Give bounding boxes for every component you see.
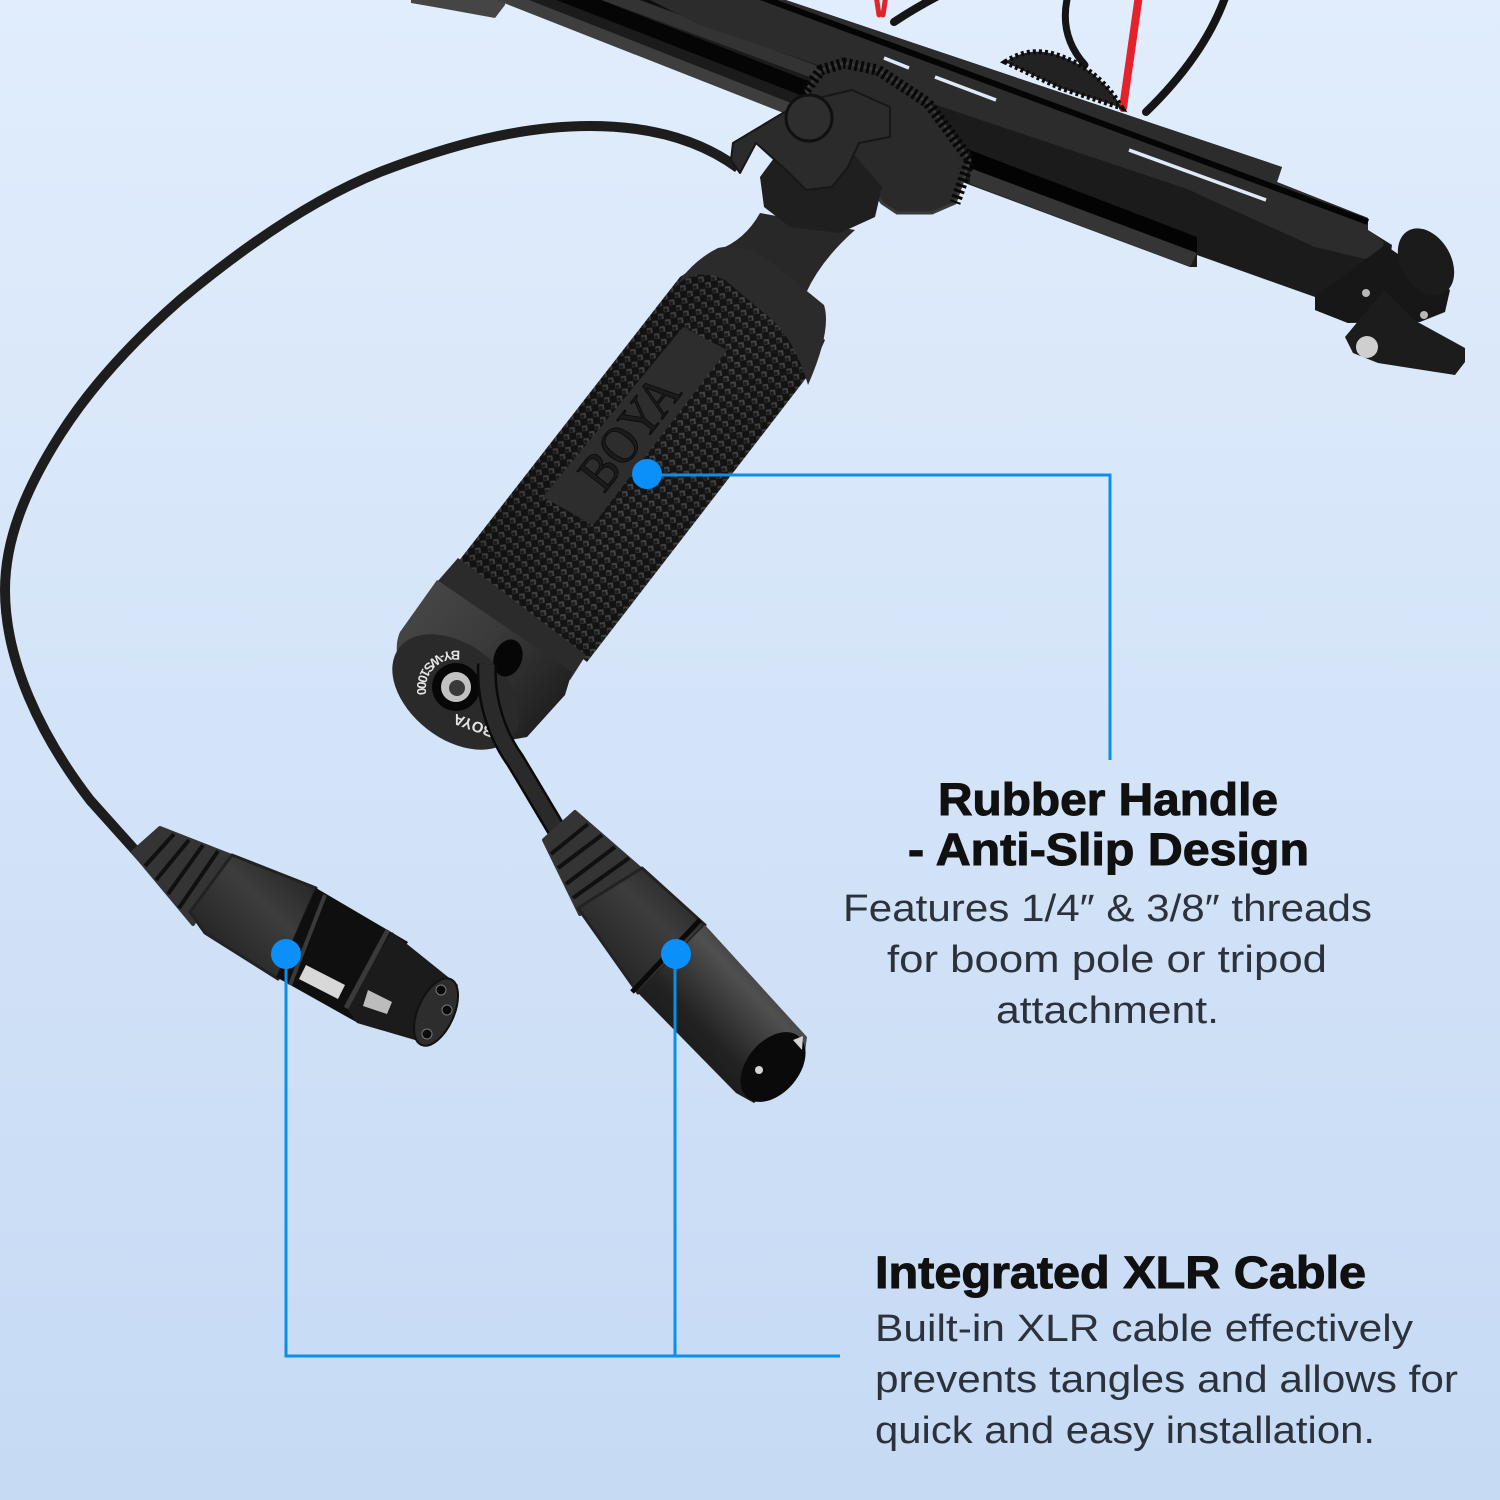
knurled grip [458,252,825,662]
wheel teeth [806,63,970,203]
plug face [727,1020,819,1114]
text block: rubber handle [843,774,1372,1032]
callout dot [632,459,662,489]
cap logo engraving: BOYA [451,710,496,740]
handle mount [718,63,970,293]
heading: Integrated XLR Cable [875,1247,1366,1298]
rail gray bands [500,0,860,113]
text block: XLR cable [875,1247,1458,1452]
description: prevents tangles and allows for [875,1359,1458,1401]
socket pins [422,985,452,1039]
cap engraving: BY-WS1000 [416,650,460,695]
barrel [190,855,316,979]
end block [1315,245,1450,323]
plug pins [755,1036,803,1074]
cap face [370,611,542,773]
short XLR cable [487,664,558,832]
rail body [503,0,1392,323]
front shell [345,932,458,1045]
latch windows [299,965,392,1014]
metal shell [638,925,807,1103]
socket face [405,972,467,1052]
shell ring [632,920,700,992]
lever knob [731,90,890,190]
shell ring [290,895,325,985]
disc knob [1386,218,1466,306]
barrel [578,868,705,993]
end piece [411,0,505,18]
female XLR connector [133,828,467,1052]
wing screw [1345,290,1465,375]
neck [718,213,855,293]
rail lower channel [970,150,1197,255]
description [875,1308,1458,1452]
suspension cables [876,0,1226,112]
front ring [346,930,388,1008]
lower collar [437,558,586,680]
ball joint [760,150,882,233]
thumb wheels [806,63,970,213]
heading: - Anti-Slip Design [908,824,1309,875]
description: for boom pole or tripod [887,939,1327,981]
grip shading [458,252,825,662]
BOYA logo: BOYA [566,364,692,501]
end cap [397,580,572,743]
rear thumb wheel [1005,52,1122,108]
microphone shock mount rail [411,0,1466,375]
callout leader: rubber handle [632,459,1110,760]
rubber handle [392,246,826,750]
rail upper plate [640,0,1384,262]
small bolts [1362,289,1428,319]
callout leader: XLR cable [271,939,840,1356]
long XLR cable [5,126,738,858]
female dot [271,939,301,969]
top collar [672,247,826,385]
strain relief [133,828,234,924]
knob button [786,95,832,141]
shell [276,888,408,1023]
description: quick and easy installation. [875,1410,1375,1452]
logo plate [543,327,727,525]
male XLR connector [544,812,819,1114]
rail lower flange [970,168,1197,267]
rail slots [755,0,1368,222]
description: Built-in XLR cable effectively [875,1308,1413,1350]
heading: Rubber Handle [938,774,1278,825]
clamp screw [1315,218,1466,375]
screw head [1356,336,1378,358]
thread insert [432,663,480,711]
description [843,888,1372,1032]
description: attachment. [996,990,1219,1032]
male dot [661,939,691,969]
cable exit hole [488,635,528,681]
strain relief [544,812,644,914]
description: Features 1/4″ & 3/8″ threads [843,888,1372,930]
heading [908,774,1309,875]
